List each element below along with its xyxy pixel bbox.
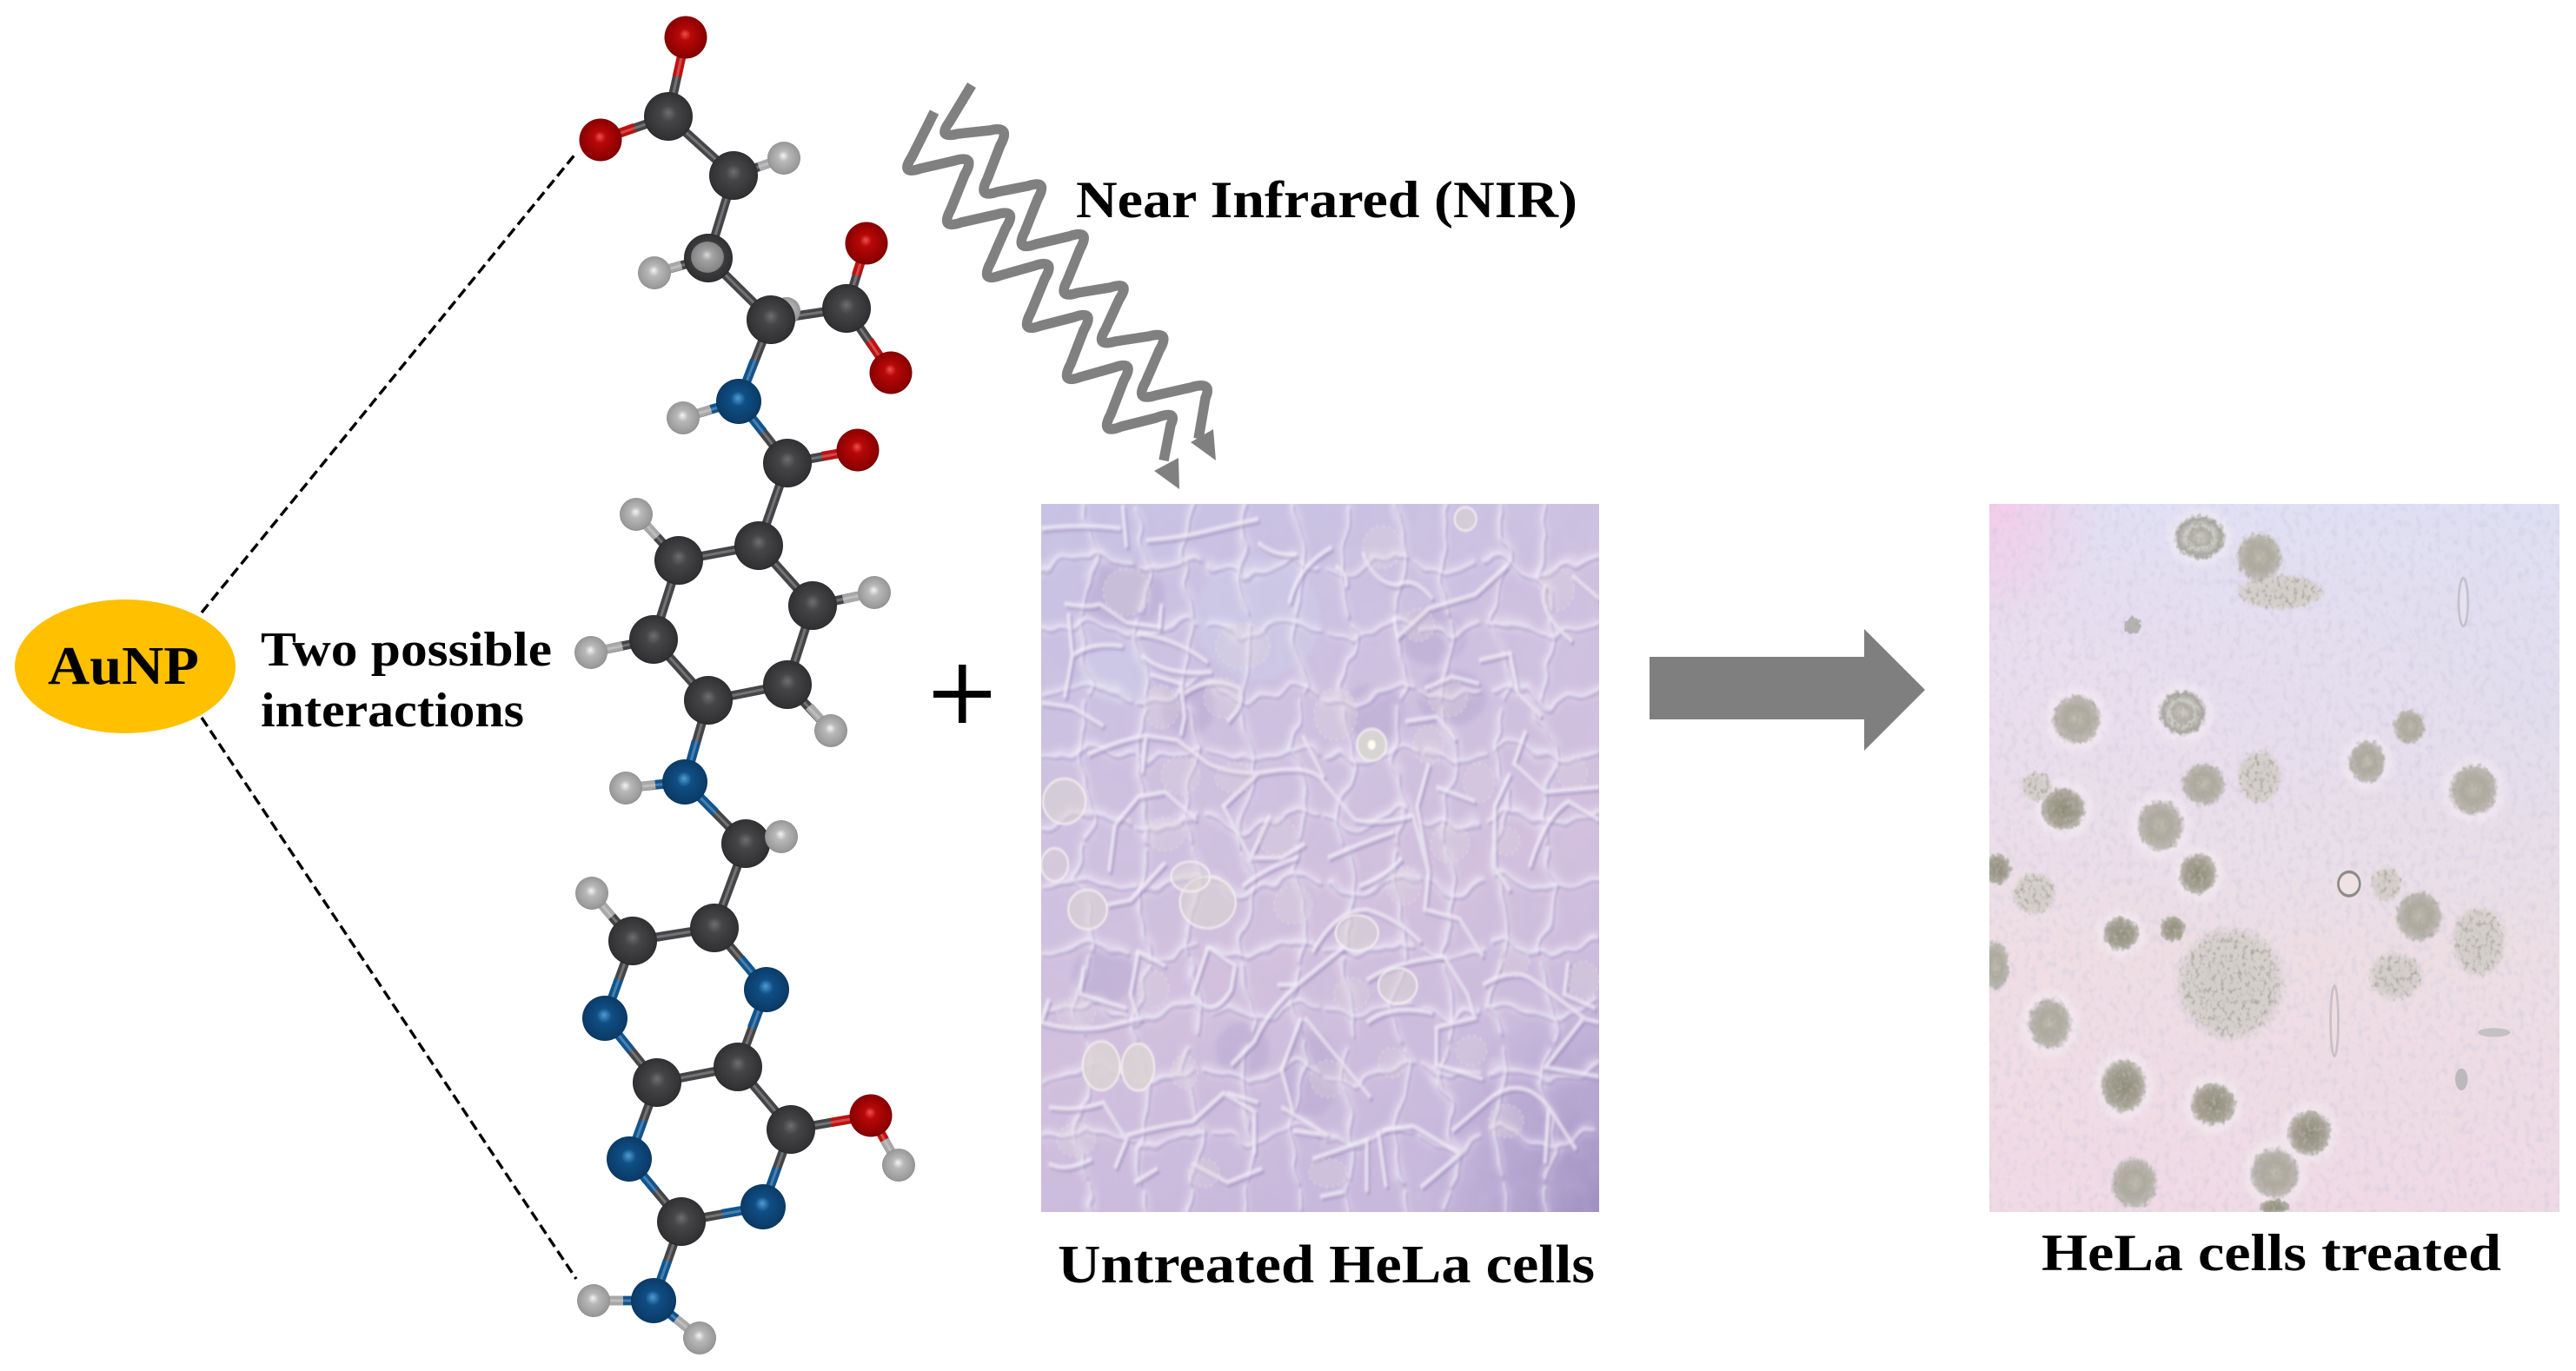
micrograph: HeLa cells treated [1989, 504, 2559, 1212]
oxygen atoms [579, 16, 913, 1136]
dashed line: AuNP to lower amine [202, 718, 576, 1279]
gold nanoparticle label: AuNP [48, 637, 199, 696]
bright halos around cells [2021, 508, 2506, 1207]
caption: HeLa cells treated: HeLa cells treated [2042, 1224, 2501, 1282]
folic acid molecule ball and stick model [574, 16, 915, 1354]
cell membrane network [1041, 505, 1601, 1215]
hydrogen atoms [574, 142, 915, 1354]
dashed line: AuNP to upper carboxyl [202, 153, 576, 613]
hydrogen atoms overlapping carbons [691, 242, 798, 853]
plus sign [933, 665, 991, 723]
block arrow [1650, 629, 1925, 751]
text: near infrared: Near Infrared (NIR) [1076, 171, 1577, 228]
molecule bonds [591, 37, 899, 1338]
near infrared wavy arrows [907, 85, 1216, 489]
caption: untreated HeLa cells: Untreated HeLa cells [1058, 1235, 1595, 1295]
text: two possible interactions [261, 623, 552, 738]
text: two possible interactions: interactions [261, 684, 524, 738]
carbon atoms [608, 92, 871, 1246]
text: two possible interactions: Two possible [261, 623, 552, 677]
micrograph: untreated HeLa cells [1041, 504, 1599, 1212]
gold nanoparticle label [15, 599, 236, 733]
nitrogen atoms [582, 379, 789, 1323]
